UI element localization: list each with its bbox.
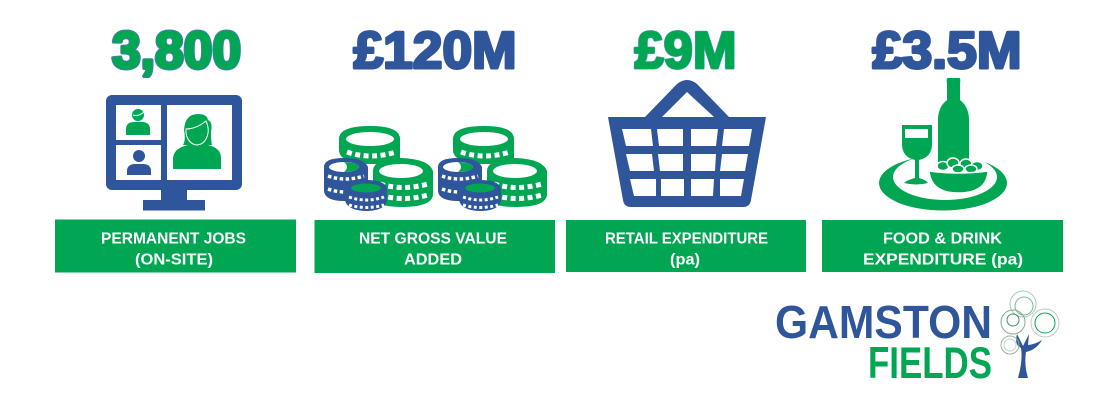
label bar: net gross value added: ADDED xyxy=(404,252,462,268)
icon: shopping basket xyxy=(608,80,766,207)
label bar: food and drink expenditure xyxy=(822,220,1063,272)
label bar: net gross value added: NET GROSS VALUE xyxy=(359,230,507,248)
icon: computer monitor with video call xyxy=(106,95,242,210)
label bar: retail expenditure: RETAIL EXPENDITURE xyxy=(605,230,768,248)
label bar: retail expenditure xyxy=(566,220,806,272)
icon: coin stacks xyxy=(324,126,547,211)
logo: Gamston Fields xyxy=(775,291,1059,388)
stat: £3.5M: £3.5M xyxy=(872,22,1022,80)
stat: 3,800: 3,800 xyxy=(112,22,241,80)
label bar: food and drink expenditure: FOOD & DRINK xyxy=(883,230,1003,248)
label bar: net gross value added xyxy=(314,220,555,273)
stat: 3,800: 3,800 xyxy=(112,22,241,80)
icon: bottle, wine glass and bowl on tray xyxy=(879,78,1007,210)
label bar: permanent jobs xyxy=(55,220,296,272)
label bar: retail expenditure: (pa) xyxy=(670,252,700,268)
logo: Gamston Fields: FIELDS xyxy=(868,337,992,388)
label bar: permanent jobs: (ON-SITE) xyxy=(135,252,213,268)
logo: Gamston Fields: GAMSTON xyxy=(775,298,992,349)
stat: £9M: £9M xyxy=(634,22,736,80)
stat: £120M: £120M xyxy=(354,22,516,80)
stat: £9M: £9M xyxy=(634,22,736,80)
label bar: food and drink expenditure: EXPENDITURE (pa) xyxy=(863,252,1023,268)
label bar: permanent jobs: PERMANENT JOBS xyxy=(101,230,246,248)
